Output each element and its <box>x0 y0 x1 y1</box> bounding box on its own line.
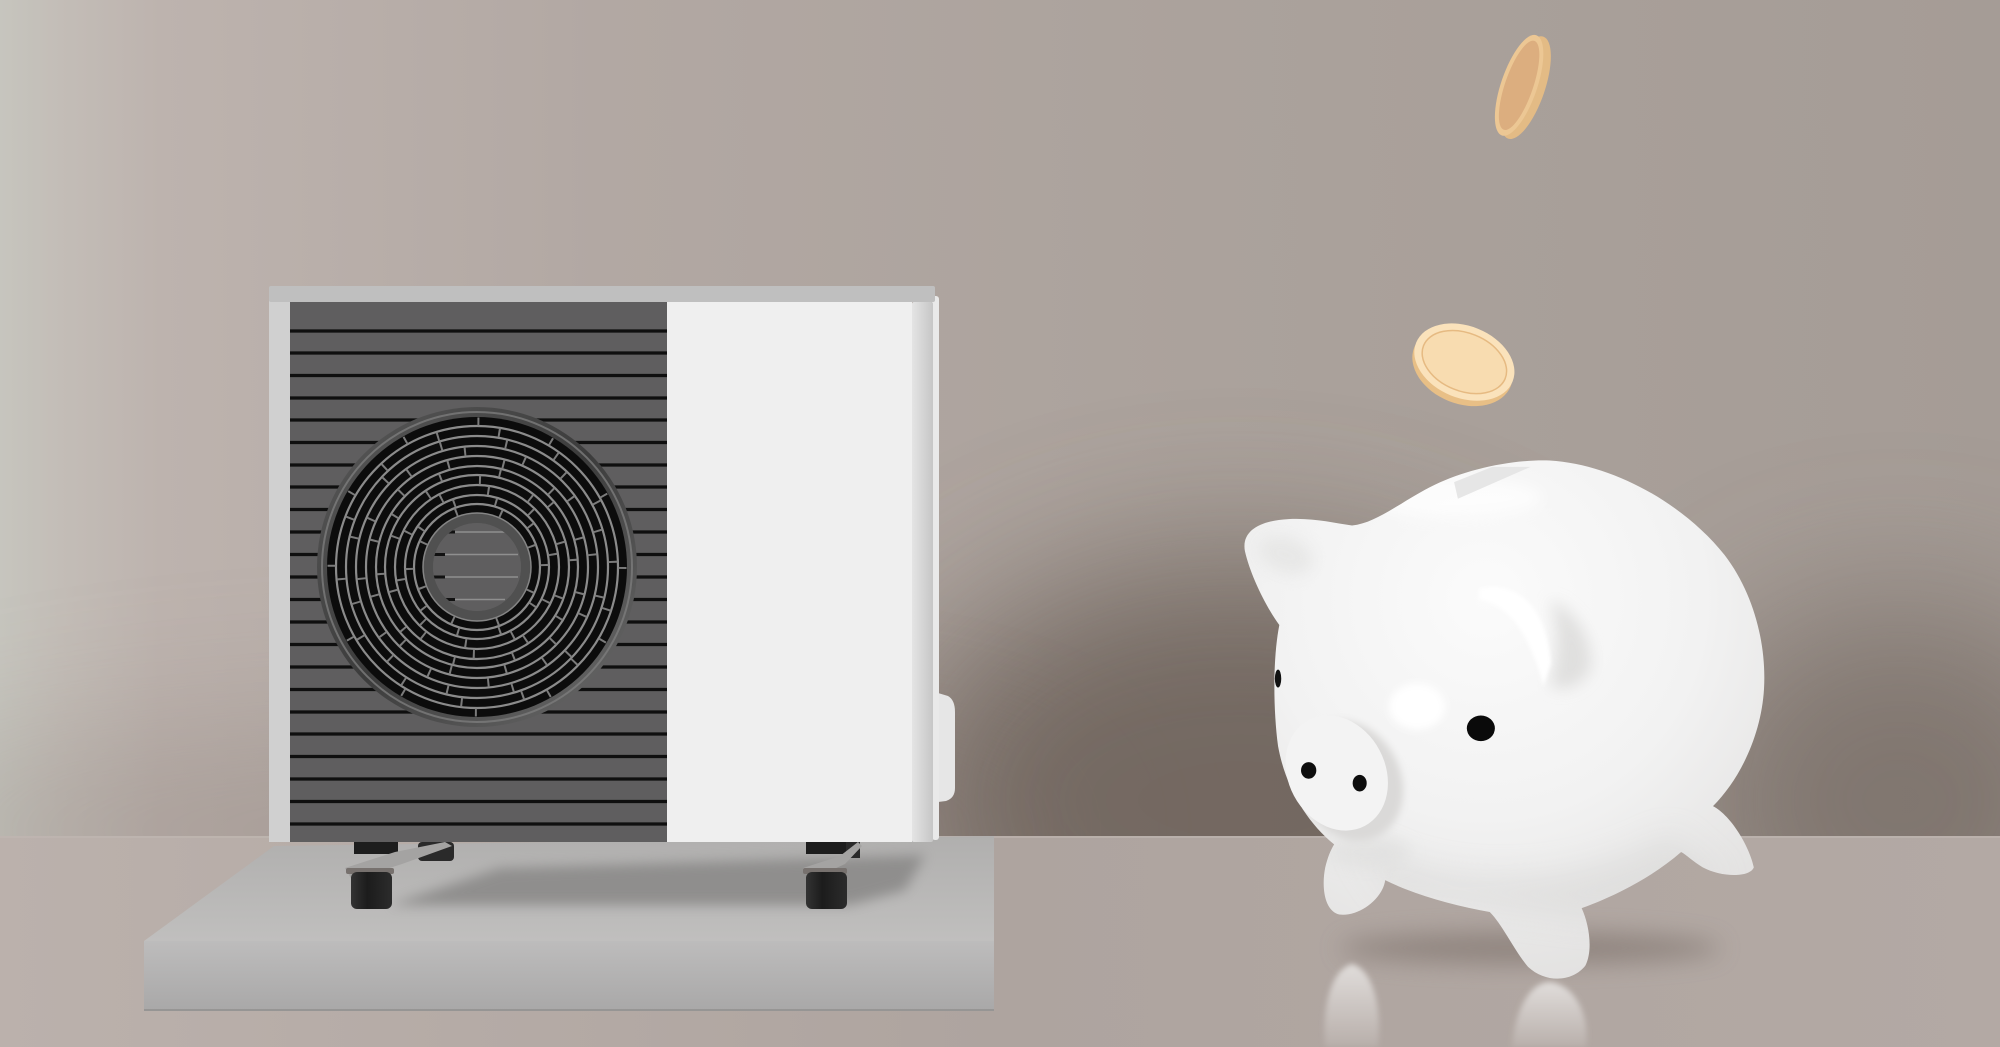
pig shading and highlights <box>1253 477 1722 918</box>
floor <box>0 836 2000 1047</box>
snout shadow <box>1314 720 1405 840</box>
near eye <box>1467 716 1495 741</box>
left strip <box>269 300 290 842</box>
pig reflection on floor <box>1324 964 1587 1047</box>
hub ring <box>428 518 526 616</box>
right front foot <box>803 842 862 909</box>
platform <box>144 836 994 1011</box>
heat pump unit <box>269 286 955 842</box>
back left foot <box>418 842 454 861</box>
left front foot <box>345 842 452 909</box>
far eye <box>1275 670 1281 687</box>
falling coin: upper <box>1485 28 1561 145</box>
falling coin: lower <box>1400 309 1526 420</box>
right strip <box>912 302 933 842</box>
top lid <box>269 286 935 302</box>
louvre slats <box>290 331 667 824</box>
heat pump feet <box>345 842 862 909</box>
background wall <box>0 0 2000 836</box>
shadow under heat pump <box>390 855 925 905</box>
hub opening <box>434 530 518 601</box>
coin slot <box>1454 467 1531 499</box>
white panel <box>667 302 912 842</box>
pig shadow on floor <box>1340 932 1720 964</box>
outer rim <box>317 407 637 727</box>
pig body <box>1244 460 1764 979</box>
piggy bank <box>1244 460 1764 979</box>
cabinet side edge <box>932 296 939 840</box>
side service box <box>938 693 955 802</box>
dark fan opening <box>327 417 627 717</box>
platform front <box>144 941 994 1011</box>
right nostril <box>1353 775 1367 791</box>
grille panel <box>290 302 667 842</box>
left nostril <box>1301 762 1316 779</box>
fan guard <box>317 407 637 727</box>
snout <box>1266 697 1408 849</box>
radial ring spacers <box>332 422 622 712</box>
concentric rings <box>336 426 618 708</box>
